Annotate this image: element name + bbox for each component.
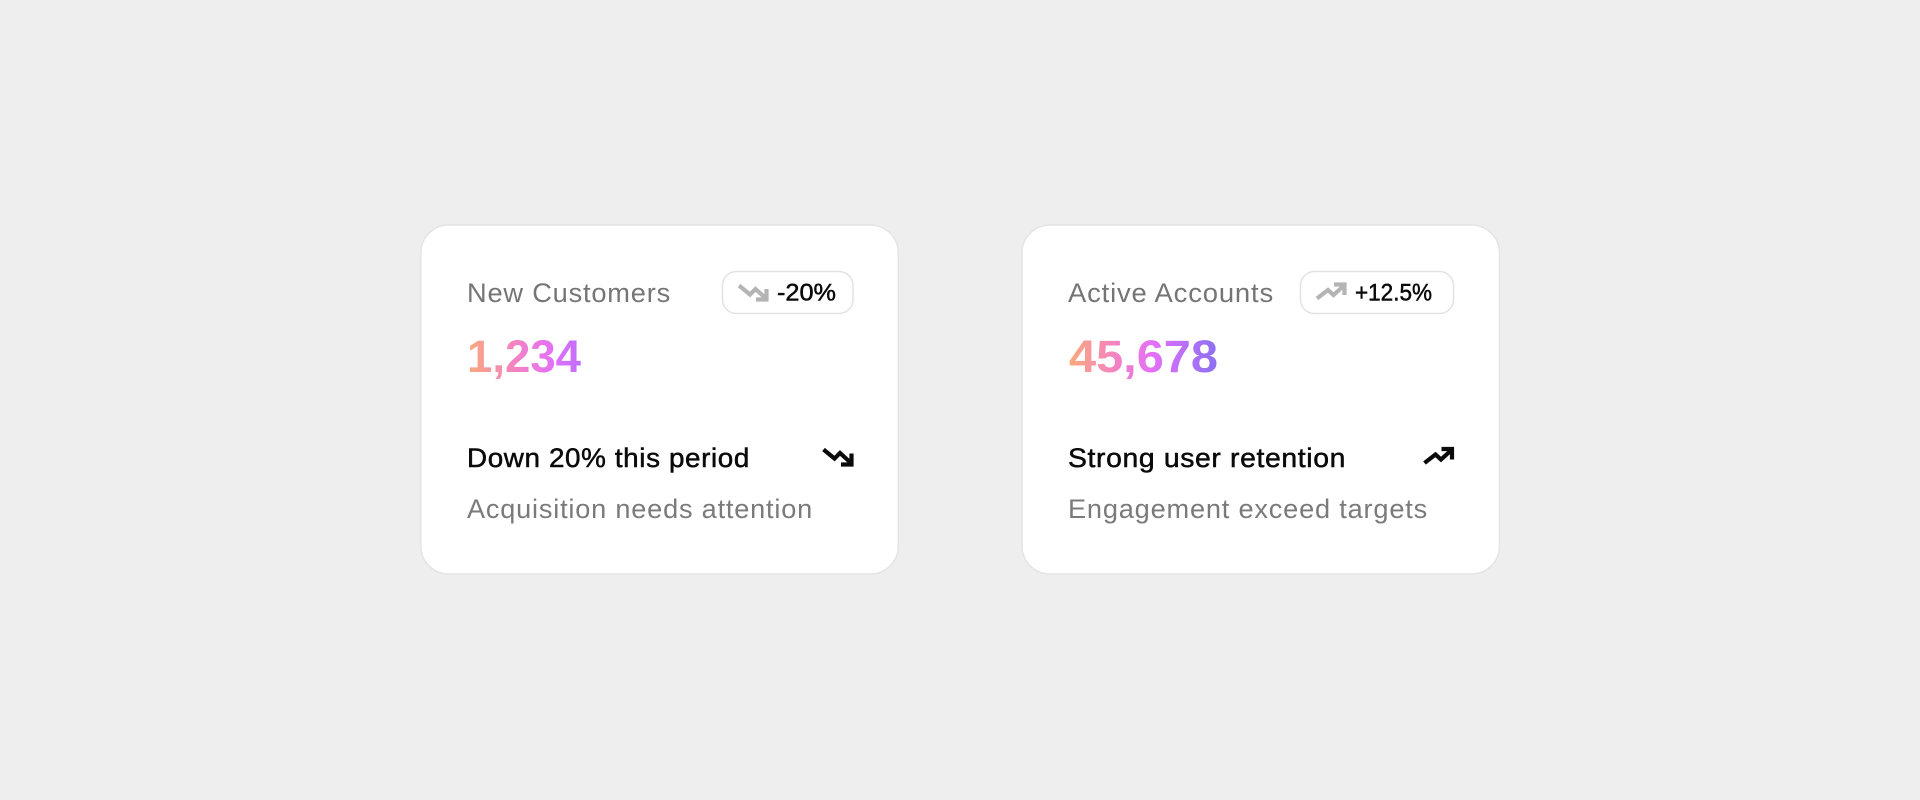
description: acquisition: Acquisition needs attention <box>467 494 813 524</box>
icon: trending up black <box>1424 449 1452 463</box>
badge: -20% <box>722 272 853 314</box>
panel: active accounts card <box>1022 225 1500 574</box>
panel: new customers card <box>421 225 898 574</box>
headline: down 20%: Down 20% this period <box>467 443 750 473</box>
label: active accounts: Active Accounts <box>1068 278 1274 308</box>
description: engagement: Engagement exceed targets <box>1068 494 1428 524</box>
icon: trending down black <box>824 450 852 464</box>
metric value: 45,678: 45,678 <box>1069 331 1218 382</box>
icon: trending down grey <box>739 286 766 300</box>
icon: trending up grey <box>1317 284 1344 298</box>
badge value: -20% <box>777 280 836 306</box>
badge value: +12.5% <box>1355 280 1432 306</box>
badge: +12.5% <box>1300 272 1454 314</box>
label: new customers: New Customers <box>467 278 671 308</box>
headline: strong retention: Strong user retention <box>1068 443 1346 473</box>
metric value: 1,234: 1,234 <box>467 331 581 382</box>
